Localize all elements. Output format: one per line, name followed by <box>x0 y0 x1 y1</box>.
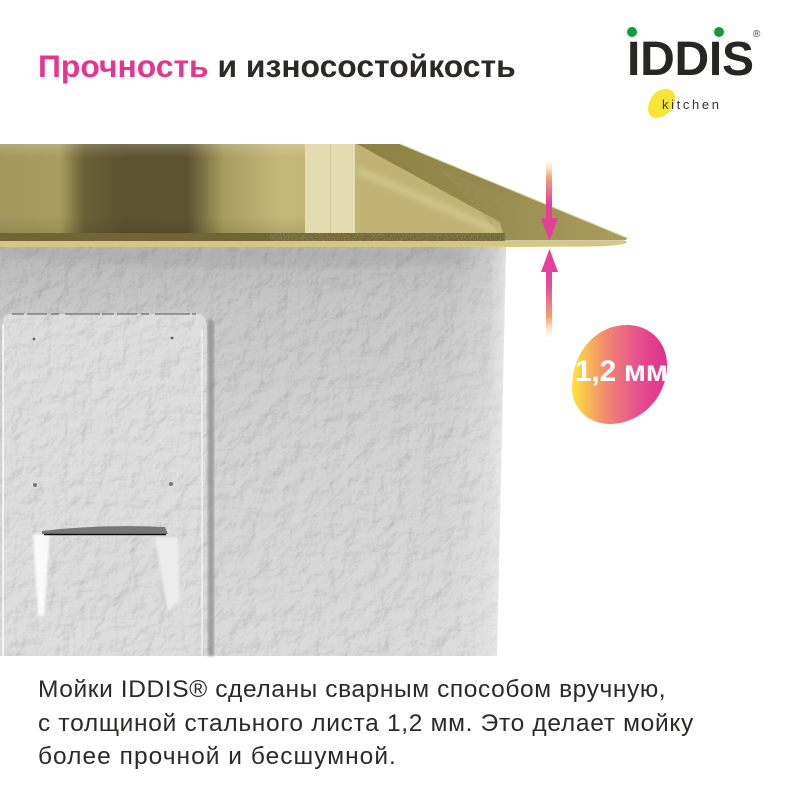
description text <box>38 676 694 770</box>
thickness badge <box>572 325 668 424</box>
dimension arrow: top <box>541 160 558 241</box>
sink wall <box>0 246 506 656</box>
description text: с толщиной стального листа 1,2 мм. Это делает мойку <box>38 710 694 736</box>
logo registered mark: ® <box>753 29 761 40</box>
logo kitchen: kitchen <box>662 97 719 112</box>
folded tab <box>33 526 182 620</box>
gold rim flange <box>0 144 627 247</box>
welded plate <box>3 314 214 656</box>
gold basin interior <box>0 144 505 234</box>
description text: Мойки IDDIS® сделаны сварным способом вручную, <box>38 676 666 703</box>
title: Прочность и износостойкость <box>38 48 516 84</box>
logo dots <box>627 27 724 37</box>
thickness badge: 1,2 мм <box>575 355 668 388</box>
description text: более прочной и бесшумной. <box>38 743 397 770</box>
logo yellow blob <box>648 89 675 118</box>
logo wordmark: IDDIS <box>627 33 754 86</box>
logo: IDDIS kitchen <box>627 27 761 118</box>
dimension arrow: bottom <box>541 249 558 337</box>
